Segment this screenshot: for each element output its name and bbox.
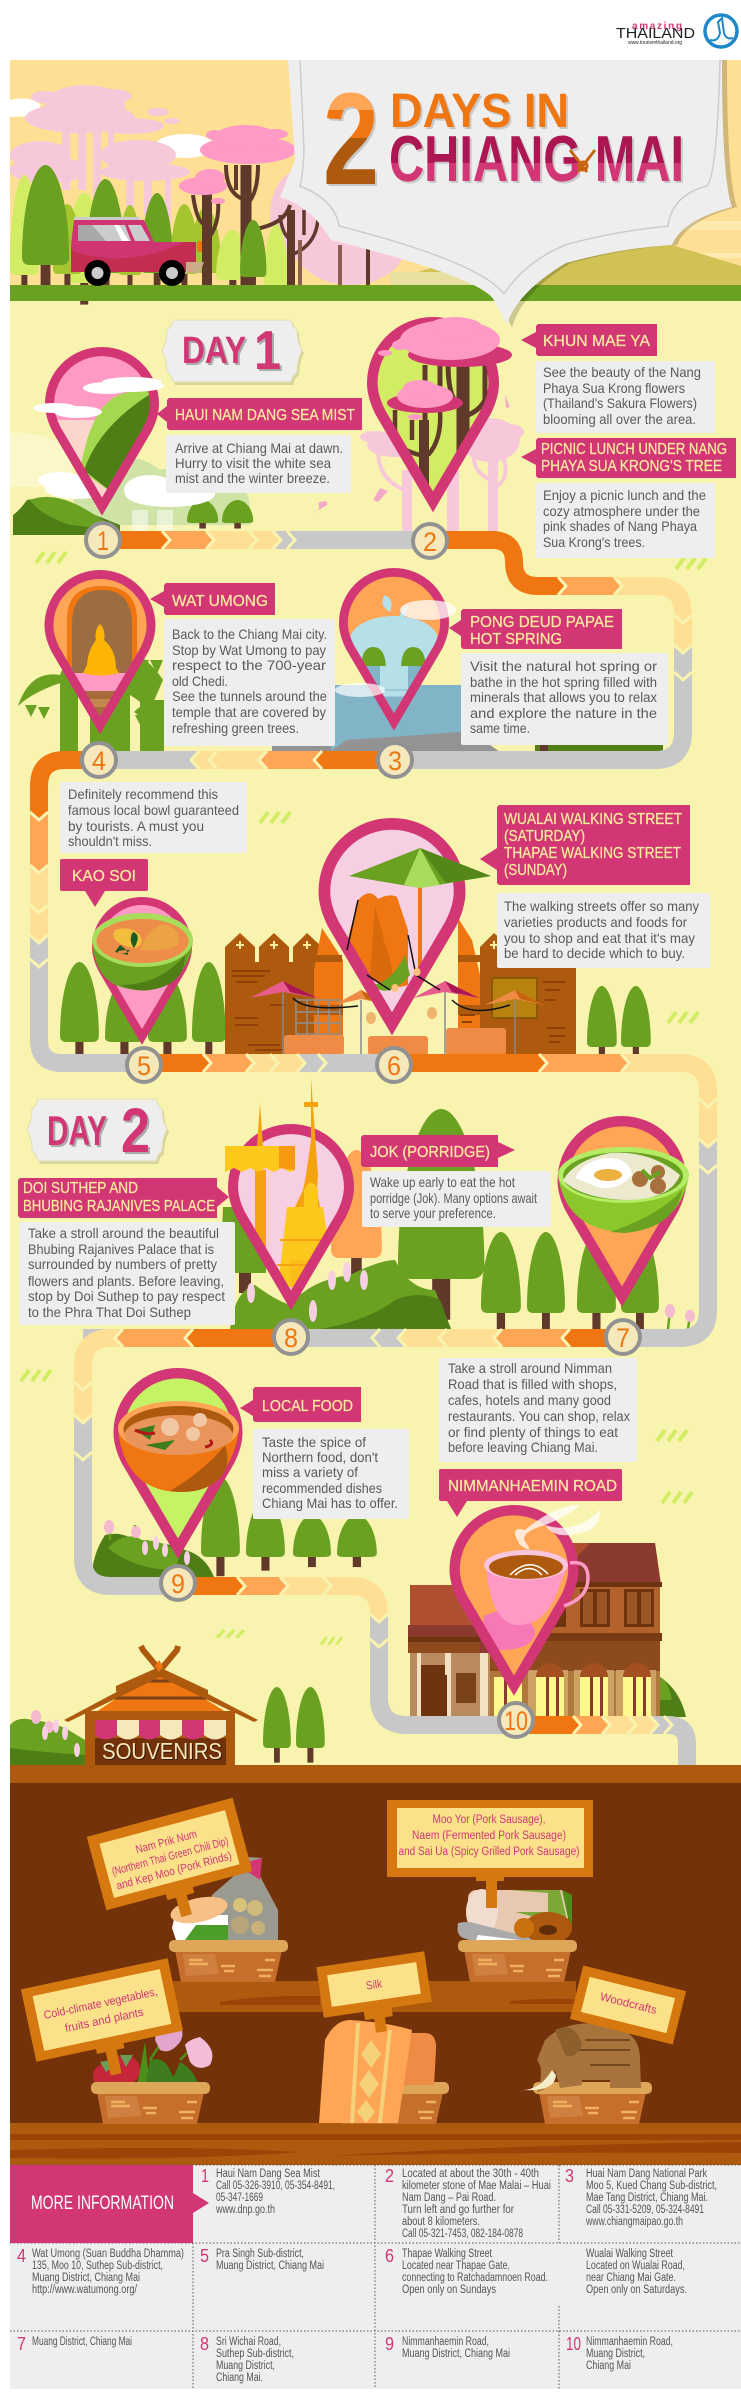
info 6 thapae: connecting to Ratchadamnoen Road. <box>402 2272 548 2284</box>
info 4: http://www.watumong.org/ <box>32 2284 138 2296</box>
text: jok porridge <box>362 1171 551 1227</box>
scene: local food trees and bush <box>92 1477 377 1577</box>
info 4: 4 <box>17 2246 26 2266</box>
sign: moo yor: Naem (Fermented Pork Sausage) <box>412 1830 566 1842</box>
label: local food: LOCAL FOOD <box>262 1398 353 1415</box>
info 6 thapae: 6 <box>385 2246 394 2266</box>
number markers: 7 <box>616 1323 630 1353</box>
day 1 plaque <box>162 319 304 385</box>
info 6 wualai: near Chiang Mai Gate. <box>586 2272 676 2284</box>
info 2 <box>385 2166 551 2240</box>
label: doi suthep: DOI SUTHEP AND <box>23 1180 138 1197</box>
day 1 plaque: 1 <box>254 319 281 381</box>
text: nimmanhaemin: before leaving Chiang Mai. <box>448 1439 598 1455</box>
number markers: 4 <box>92 746 106 776</box>
day 1 plaque: DAY <box>182 330 246 372</box>
scene: brick walls and market <box>225 918 651 1062</box>
pin 5: kao soi bowl <box>92 901 193 1039</box>
title text: DAYS IN <box>390 85 569 138</box>
info 5: Pra Singh Sub-district, <box>216 2248 304 2260</box>
info 1 <box>201 2166 335 2216</box>
label: pong deud papae <box>449 609 622 649</box>
text: haui nam dang <box>166 435 351 493</box>
info 9: 9 <box>385 2334 394 2354</box>
scene: hot spring pond and rocks <box>272 685 663 755</box>
text: wat umong: old Chedi. <box>172 673 228 689</box>
text: pong deud papae <box>461 653 668 745</box>
number markers <box>82 523 640 1737</box>
info 10: Nimmanhaemin Road, <box>586 2336 673 2348</box>
text: doi suthep: Bhubing Rajanives Palace that is <box>28 1241 214 1257</box>
label: walking streets: WUALAI WALKING STREET <box>504 811 682 828</box>
info 5: 5 <box>200 2246 209 2266</box>
info 2: 2 <box>385 2166 394 2186</box>
info 8: Suthep Sub-district, <box>216 2348 294 2360</box>
title text <box>323 65 684 212</box>
title shield <box>280 60 737 328</box>
text: local food: Taste the spice of <box>262 1434 366 1450</box>
scene: kao soi trees <box>60 962 226 1061</box>
info 10: 10 <box>566 2334 581 2354</box>
info 9: Muang District, Chiang Mai <box>402 2348 510 2360</box>
pin 3: hot spring <box>335 572 456 736</box>
text: doi suthep: surrounded by numbers of pretty <box>28 1256 217 1272</box>
text: khun mae ya <box>536 361 715 433</box>
text: local food <box>253 1429 409 1519</box>
info 4: Wat Umong (Suan Buddha Dhamma) <box>32 2248 184 2260</box>
text: khun mae ya: blooming all over the area. <box>543 411 696 427</box>
sign: cold-climate vegetables: fruits and plants <box>64 2007 145 2035</box>
label: khun mae ya <box>521 324 657 356</box>
info 8: 8 <box>200 2334 209 2354</box>
info 6 wualai: Open only on Saturdays. <box>586 2284 687 2296</box>
pin 1: sea mist <box>33 352 164 520</box>
scene: day 2 trees and bushes <box>222 1109 695 1332</box>
pin 6: walking street bag <box>324 824 491 1026</box>
text: kao soi: shouldn't miss. <box>68 833 152 849</box>
pin 7: jok porridge bowl <box>558 1121 689 1299</box>
sign: nam prik num: and Kep Moo (Pork Rinds) <box>115 1850 233 1893</box>
text: haui nam dang: Arrive at Chiang Mai at dawn. <box>175 440 343 456</box>
text: pong deud papae: minerals that allows you to relax <box>470 689 657 705</box>
text: walking streets <box>497 893 710 968</box>
text: doi suthep <box>19 1222 235 1325</box>
day 2 plaque <box>27 1096 169 1166</box>
info 10: Muang District, <box>586 2348 645 2360</box>
number markers: 6 <box>387 1051 401 1081</box>
pin 8: doi suthep pagoda <box>225 1078 353 1302</box>
text: wat umong: See the tunnels around the <box>172 688 327 704</box>
number markers: 3 <box>388 746 402 776</box>
header scene <box>10 60 741 305</box>
info 6 wualai: Located on Wualai Road, <box>586 2260 685 2272</box>
basket: sausages <box>458 1889 577 1982</box>
text: haui nam dang: Hurry to visit the white sea <box>175 455 331 471</box>
text: wat umong <box>164 619 335 746</box>
info 1: Haui Nam Dang Sea Mist <box>216 2168 321 2180</box>
number markers: 5 <box>137 1051 151 1081</box>
pin 10: coffee cup <box>455 1505 600 1688</box>
text: nimmanhaemin: Take a stroll around Nimman <box>448 1360 612 1376</box>
text: jok porridge: Wake up early to eat the hot <box>370 1174 515 1190</box>
number markers: 1 <box>97 526 109 556</box>
number markers: 8 <box>284 1323 298 1353</box>
info 1: 05-347-1669 <box>216 2192 263 2204</box>
icon: crossed naga ornament <box>570 150 595 172</box>
info 7 <box>17 2334 132 2354</box>
souvenir shop <box>64 1646 258 1765</box>
text: doi suthep: flowers and plants. Before leaving, <box>28 1273 224 1289</box>
info 6 thapae: Thapae Walking Street <box>402 2248 493 2260</box>
text: walking streets: varieties products and foods for <box>504 914 687 930</box>
text: picnic lunch: Sua Krong's trees. <box>543 534 645 550</box>
text: jok porridge: to serve your preference. <box>370 1205 496 1221</box>
text: local food: Chiang Mai has to offer. <box>262 1495 398 1511</box>
basket: vegetables and tulips <box>91 2020 212 2124</box>
info 8: Sri Wichai Road, <box>216 2336 281 2348</box>
label: walking streets <box>480 805 690 885</box>
info 8: Chiang Mai. <box>216 2372 263 2384</box>
text: walking streets: be hard to decide which to buy. <box>504 945 685 961</box>
label: pong deud papae: HOT SPRING <box>470 631 562 648</box>
text: wat umong: Back to the Chiang Mai city. <box>172 626 327 642</box>
sign: moo yor: and Sai Ua (Spicy Grilled Pork Sausage) <box>398 1846 580 1858</box>
pin 2: khun mae ya tree <box>372 317 512 510</box>
label: walking streets: (SATURDAY) <box>504 828 585 845</box>
info 2: Located at about the 30th - 40th <box>402 2168 539 2180</box>
text: pong deud papae: bathe in the hot spring filled with <box>470 674 657 690</box>
info 5 <box>200 2246 324 2272</box>
text: nimmanhaemin: or find plenty of things to eat <box>448 1424 618 1440</box>
text: doi suthep: to the Phra That Doi Suthep <box>28 1304 191 1320</box>
label: wat umong <box>150 583 275 615</box>
pin 9: local food bowl <box>118 1373 241 1551</box>
text: wat umong: refreshing green trees. <box>172 720 299 736</box>
text: pong deud papae: and explore the nature in the <box>470 705 657 721</box>
info 1: www.dnp.go.th <box>215 2204 275 2216</box>
logo: tourism authority of thailand <box>705 15 737 47</box>
sign: cold-climate vegetables: Cold-climate vegetables, <box>43 1986 159 2022</box>
scene: pale pink trees behind pin 2 <box>312 395 524 532</box>
info 5: Muang District, Chiang Mai <box>216 2260 324 2272</box>
info 6 thapae <box>385 2246 548 2296</box>
label: local food <box>240 1387 361 1422</box>
text: picnic lunch: Enjoy a picnic lunch and the <box>543 487 706 503</box>
label: doi suthep <box>18 1178 229 1218</box>
text: haui nam dang: mist and the winter breeze. <box>175 470 330 486</box>
basket: jar and snack bag <box>168 1855 288 1982</box>
text: local food: miss a variety of <box>262 1464 358 1480</box>
text: nimmanhaemin: Road that is filled with shops, <box>448 1376 617 1392</box>
scene: nimman shophouses <box>408 1543 686 1717</box>
info 10: Chiang Mai <box>586 2360 631 2372</box>
logo: amazing thailand: www.tourismthailand.org <box>628 40 682 46</box>
sign: moo yor: Moo Yor (Pork Sausage), <box>432 1814 546 1826</box>
title text: 2 <box>323 65 379 212</box>
scene: bush by souvenir shop <box>10 1687 325 1765</box>
logo: amazing thailand <box>616 21 695 46</box>
info 8: Muang District, <box>216 2360 275 2372</box>
info 2: Call 05-321-7453, 082-184-0878 <box>402 2228 523 2240</box>
info 4 <box>17 2246 184 2296</box>
sign: silk <box>316 1951 435 2040</box>
info 7: Muang District, Chiang Mai <box>32 2336 132 2348</box>
logo: amazing thailand: THAILAND <box>616 25 695 42</box>
label: pong deud papae: PONG DEUD PAPAE <box>470 614 614 631</box>
basket: silk <box>319 2020 449 2124</box>
text: wat umong: respect to the 700-year <box>172 657 326 673</box>
info 10 <box>566 2334 673 2372</box>
label: kao soi <box>60 859 148 907</box>
sign: moo yor <box>387 1800 593 1908</box>
sign: cold-climate vegetables <box>21 1958 189 2090</box>
text: local food: recommended dishes <box>262 1480 382 1496</box>
background: cream panel <box>10 60 741 1770</box>
info 4: 135, Moo 10, Suthep Sub-district, <box>32 2260 163 2272</box>
sign: nam prik num <box>87 1798 259 1935</box>
info 3: Mae Tang District, Chiang Mai. <box>586 2192 708 2204</box>
info 2: Turn left and go further for <box>402 2204 514 2216</box>
souvenir shop: SOUVENIRS <box>102 1738 222 1764</box>
info 6 thapae: Open only on Sundays <box>402 2284 496 2296</box>
sign: woodcrafts: Woodcrafts <box>599 1991 658 2017</box>
text: jok porridge: porridge (Jok). Many options await <box>370 1190 537 1206</box>
info 4: Muang District, Chiang Mai <box>32 2272 140 2284</box>
label: haui nam dang sea mist <box>157 398 362 430</box>
label: doi suthep: BHUBING RAJANIVES PALACE <box>23 1198 215 1215</box>
info 6 wualai <box>586 2248 687 2296</box>
info 1: 1 <box>201 2166 209 2186</box>
label: kao soi: KAO SOI <box>72 868 136 885</box>
info 3: 3 <box>565 2166 574 2186</box>
number markers: 10 <box>504 1706 528 1736</box>
info 9: Nimmanhaemin Road, <box>402 2336 489 2348</box>
info 2: Nam Dang – Pai Road. <box>402 2192 496 2204</box>
info 2: kilometer stone of Mae Malai – Huai <box>402 2180 551 2192</box>
text: nimmanhaemin: cafes, hotels and many good <box>448 1392 611 1408</box>
label: walking streets: (SUNDAY) <box>504 862 567 879</box>
day 2 plaque: DAY <box>47 1107 107 1154</box>
label: walking streets: THAPAE WALKING STREET <box>504 845 681 862</box>
info 3: Huai Nam Dang National Park <box>586 2168 707 2180</box>
label: nimmanhaemin road <box>439 1469 622 1517</box>
info 7: 7 <box>17 2334 26 2354</box>
text: pong deud papae: same time. <box>470 720 530 736</box>
text: picnic lunch <box>536 483 715 558</box>
info 3 <box>565 2166 717 2228</box>
route road <box>30 531 717 1766</box>
more information banner <box>10 2165 209 2243</box>
text: kao soi: by tourists. A must you <box>68 818 204 834</box>
day 2 plaque: 2 <box>121 1096 150 1166</box>
text: khun mae ya: See the beauty of the Nang <box>543 364 701 380</box>
text: nimmanhaemin: restaurants. You can shop, relax <box>448 1408 630 1424</box>
pin 4: wat umong buddha <box>49 574 155 737</box>
more information banner: MORE INFORMATION <box>31 2193 174 2214</box>
basket: elephant carving <box>522 2023 652 2124</box>
label: wat umong: WAT UMONG <box>172 593 268 610</box>
text: walking streets: The walking streets offer so many <box>504 898 699 914</box>
info 1: Call 05-326-3910, 05-354-8491, <box>216 2180 335 2192</box>
text: kao soi: famous local bowl guaranteed <box>68 802 239 818</box>
label: jok porridge: JOK (PORRIDGE) <box>370 1144 490 1161</box>
info 9 <box>385 2334 510 2360</box>
label: jok porridge <box>361 1135 515 1167</box>
text: local food: Northern food, don't <box>262 1449 378 1465</box>
label: haui nam dang sea mist: HAUI NAM DANG SEA MIST <box>175 407 355 424</box>
sign: silk: Silk <box>365 1978 383 1993</box>
sign: nam prik num: (Northern Thai Green Chili Dip) <box>111 1836 230 1878</box>
logo: amazing thailand: amazing <box>632 21 682 32</box>
decorative slash marks <box>21 552 706 1645</box>
text: kao soi <box>60 782 247 853</box>
text: nimmanhaemin <box>439 1358 637 1462</box>
info 6 wualai: Wualai Walking Street <box>586 2248 674 2260</box>
car <box>71 217 204 286</box>
scene: sea mist bush and pale trees <box>10 433 253 535</box>
text: doi suthep: Take a stroll around the beautiful <box>28 1225 219 1241</box>
text: kao soi: Definitely recommend this <box>68 786 218 802</box>
panel: souvenir shelf background <box>10 1765 741 2165</box>
text: walking streets: you to shop and eat that it's may <box>504 930 695 946</box>
info 6 thapae: Located near Thapae Gate, <box>402 2260 510 2272</box>
text: doi suthep: stop by Doi Suthep to pay respect <box>28 1288 225 1304</box>
text: wat umong: temple that are covered by <box>172 704 326 720</box>
info 8 <box>200 2334 294 2384</box>
sign: nam prik num: Nam Prik Num <box>134 1828 198 1856</box>
text: khun mae ya: Phaya Sua Krong flowers <box>543 380 685 396</box>
number markers: 2 <box>423 527 437 557</box>
sign: woodcrafts <box>570 1965 686 2045</box>
text: khun mae ya: (Thailand's Sakura Flowers) <box>543 395 697 411</box>
label: nimmanhaemin road: NIMMANHAEMIN ROAD <box>448 1478 617 1495</box>
info 3: www.chiangmaipao.go.th <box>585 2216 683 2228</box>
text: picnic lunch: pink shades of Nang Phaya <box>543 518 697 534</box>
label: khun mae ya: KHUN MAE YA <box>543 333 650 350</box>
text: picnic lunch: cozy atmosphere under the <box>543 503 700 519</box>
scene: trees behind pin 4 <box>18 650 165 760</box>
text: pong deud papae: Visit the natural hot spring or <box>470 658 657 674</box>
panel: more information table <box>10 2165 741 2389</box>
label: picnic lunch <box>521 438 736 478</box>
text: wat umong: Stop by Wat Umong to pay <box>172 642 326 658</box>
number markers: 9 <box>171 1569 185 1599</box>
info 2: about 8 kilometers. <box>402 2216 480 2228</box>
